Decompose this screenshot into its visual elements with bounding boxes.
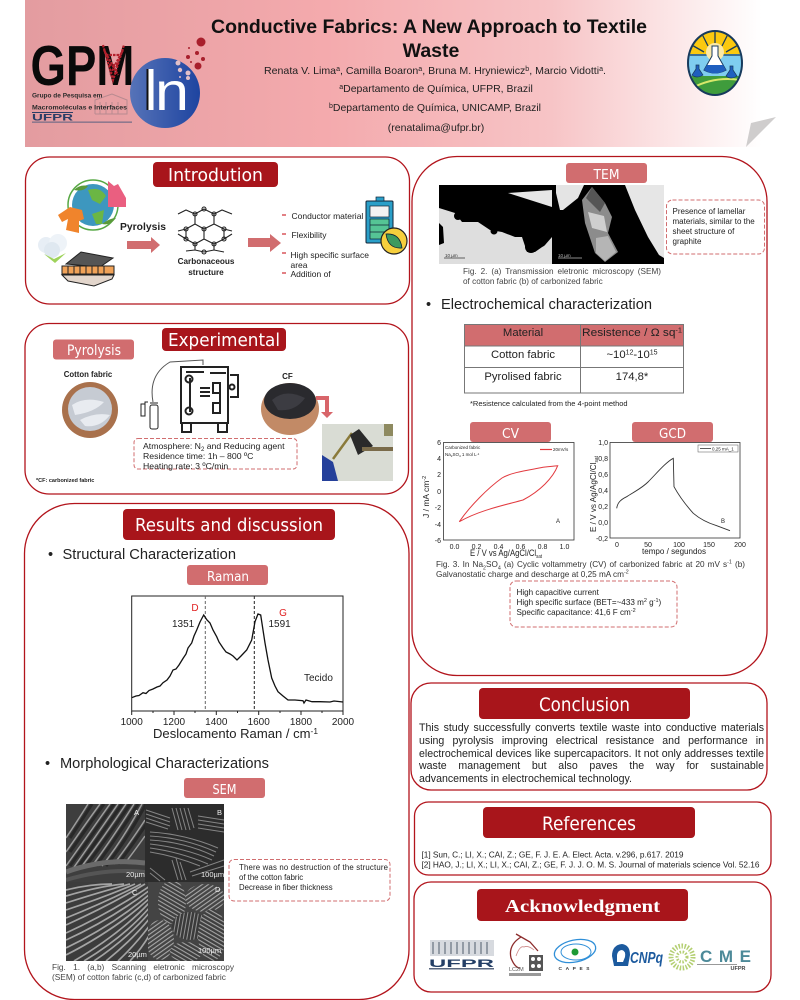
panel: acknowledgment (414, 882, 771, 992)
authors and affiliations: Departamento de Química, UNICAMP, Brazil (333, 102, 541, 114)
list: properties (282, 211, 369, 279)
title: Waste (403, 40, 460, 62)
caption: figure 2: of cotton fabric (b) of carbonized fabric (463, 277, 603, 286)
logo: LC2M: LC2M (509, 967, 524, 973)
chart: cyclic voltammetry: 20mV/s (553, 447, 569, 452)
heading: Introdution: Introdution (168, 165, 263, 186)
chart: Raman spectrum: 1800 (290, 717, 313, 728)
chart: cyclic voltammetry: 0.0 (450, 544, 459, 551)
image: SEM micrographs: D (215, 885, 221, 894)
subheading: Pyrolysis (53, 340, 134, 360)
icon: stacked fabric layers (62, 252, 114, 286)
list: properties: Flexibility (292, 230, 327, 240)
chart: galvanostatic charge-discharge: B (721, 519, 725, 525)
logo: GPM: GPM (30, 33, 134, 97)
title (211, 16, 647, 62)
logo: CAPES: CAPES (558, 966, 590, 972)
title: Conductive Fabrics: A New Approach to Textile (211, 16, 647, 38)
panel: TEM and electrochemical characterization (412, 156, 767, 676)
chart: cyclic voltammetry: 2 (437, 472, 441, 479)
callout: electrochemical findings: -1 (654, 598, 659, 604)
authors and affiliations: a (339, 84, 343, 91)
chart: galvanostatic charge-discharge: 0,4 (598, 488, 608, 495)
chart: Raman spectrum: D (191, 603, 199, 614)
conclusion text: electrochemical devices like supercapacitors. It not only addresses textile (419, 748, 764, 760)
authors and affiliations: b (329, 103, 333, 110)
callout: electrochemical findings: 2 (644, 598, 647, 604)
heading: Introdution (153, 162, 278, 187)
callout: lamellar materials: materials, similar to the (672, 217, 755, 226)
list: properties: High specific surface (290, 250, 369, 260)
image: SEM micrographs: A (134, 808, 139, 817)
logo: CNPq: CNPq (630, 950, 663, 967)
logo: GPM: Macromoléculas e Interfaces (32, 104, 127, 112)
reference list: [2] HAO, J.; LI, X.; LI, X.; CAI, Z.; GE, F. J. J. O. M. S. Journal of materials science Vol. 52.16 (422, 860, 760, 870)
callout: lamellar materials: sheet structure of (672, 227, 735, 236)
logo: In circle (130, 38, 206, 128)
logo: CME UFPR (671, 946, 751, 972)
chart: cyclic voltammetry: Na (445, 452, 451, 457)
chart: galvanostatic charge-discharge: -0,2 (596, 536, 608, 543)
label: Pyrolysis: Pyrolysis (120, 221, 166, 233)
conclusion text: This study successfully converts textile waste into conductive materials (419, 722, 764, 734)
chart: cyclic voltammetry: -1 (477, 452, 480, 456)
image: SEM micrographs: 20µm (126, 870, 145, 879)
image: cotton in bowl (62, 382, 118, 438)
chart: galvanostatic charge-discharge: 0,2 (598, 504, 608, 511)
heading: Acknowledgment (477, 889, 688, 921)
authors and affiliations: Departamento de Química, UFPR, Brazil (343, 83, 533, 95)
chart: Raman spectrum: Deslocamento Raman / cm (153, 727, 304, 741)
image: flexible carbonized sample photo (322, 424, 393, 481)
chart: galvanostatic charge-discharge: 1,0 (598, 440, 608, 447)
heading: Results and discussion: Results and discussion (135, 515, 323, 536)
image: TEM micrograph A (439, 185, 552, 264)
chart: cyclic voltammetry: -4 (435, 522, 441, 529)
chart: galvanostatic charge-discharge: 0,0 (598, 520, 608, 527)
subheading: Pyrolysis: Pyrolysis (67, 343, 121, 359)
panel: experimental (25, 324, 408, 494)
chart: cyclic voltammetry: Carbonized fabric (445, 445, 481, 450)
panel: conclusion (411, 683, 767, 790)
chart: cyclic voltammetry: 0 (437, 489, 441, 496)
chart: cyclic voltammetry: -2 (422, 476, 428, 481)
chart: Raman spectrum: 1600 (248, 717, 270, 728)
image: TEM micrograph A: 10 µm (445, 253, 458, 258)
chart: Raman spectrum: 1400 (205, 717, 228, 728)
subheading: CV (470, 422, 551, 442)
chart: cyclic voltammetry: E / V vs Ag/AgCl/Cl (470, 548, 545, 558)
arrow: pyrolysis (127, 237, 160, 253)
label: carbonaceous structure (178, 257, 235, 277)
callout: pyrolysis conditions: Heating rate: 3 ºC/min (143, 461, 228, 471)
arrow: to properties (248, 234, 281, 252)
conclusion text: waste management but also paves the way for sustainable (419, 760, 764, 772)
callout: SEM findings (229, 860, 390, 901)
image: TEM micrograph B: 10 µm (558, 253, 571, 258)
chart: cyclic voltammetry: 6 (437, 440, 441, 447)
logo: GPM: UFPR (32, 112, 73, 124)
table: resistance: Resistence / Ω sq (582, 327, 671, 339)
logo: CME UFPR: UFPR (731, 966, 746, 972)
caption: figure 3: Galvanostatic charge and descharge at 0,25 mA cm-2 (436, 569, 629, 579)
subsection: morphological characterizations: Morphological Characterizations (60, 756, 269, 772)
callout: pyrolysis conditions (134, 438, 297, 471)
callout: electrochemical findings: -2 (631, 608, 636, 614)
panel frame (414, 802, 771, 875)
section: electrochemical characterization: Electrochemical characterization (441, 297, 652, 313)
panel: introduction (26, 157, 410, 304)
authors and affiliations: Renata V. Lima (264, 65, 335, 77)
image: SEM micrographs: 100µm (201, 870, 224, 879)
subheading: GCD (632, 422, 713, 442)
authors and affiliations: , Marcio Vidotti (529, 65, 599, 77)
callout: electrochemical findings: High capacitive current (516, 588, 600, 597)
panel: results and discussion (24, 504, 409, 1000)
callout: pyrolysis conditions: Residence time: 1h – 800 ºC (143, 451, 253, 461)
callout: SEM findings: There was no destruction of the structure (239, 863, 388, 872)
chart: galvanostatic charge-discharge: sat (594, 455, 600, 463)
label: CF: CF (282, 372, 293, 381)
icon: gas cylinder with tube (141, 360, 203, 429)
subheading: Raman (187, 565, 268, 585)
chart: galvanostatic charge-discharge: 0,8 (598, 456, 608, 463)
callout: pyrolysis conditions: and Reducing agent (204, 441, 285, 451)
label: cotton fabric: Cotton fabric (64, 370, 113, 379)
label: carbonaceous structure: structure (188, 268, 224, 277)
authors and affiliations: , Bruna M. Hryniewicz (422, 65, 525, 77)
callout: electrochemical findings: ) (659, 598, 662, 607)
callout: electrochemical findings: High specific surface (BET=~433 m (516, 598, 644, 607)
arrow: to flexible sample (316, 396, 333, 418)
chart: cyclic voltammetry: 0.2 (472, 544, 481, 551)
chart: cyclic voltammetry: -2 (435, 505, 441, 512)
table: resistance: 174,8* (616, 371, 649, 383)
list: properties: Conductor material (292, 211, 363, 221)
chart: Raman spectrum: -1 (311, 727, 319, 736)
panel frame (411, 683, 767, 790)
chart: cyclic voltammetry (421, 440, 574, 560)
logo: CME UFPR: CME (700, 947, 751, 966)
chart: cyclic voltammetry: J / mA cm (421, 481, 431, 518)
panel: references (414, 802, 771, 875)
callout: lamellar materials (666, 200, 764, 254)
authors and affiliations: . (603, 65, 606, 77)
header banner (25, 0, 777, 147)
callout: SEM findings: of the cotton fabric (239, 873, 303, 882)
image: SEM micrographs (66, 804, 226, 962)
subheading: SEM (184, 778, 265, 798)
heading: References: References (542, 813, 636, 835)
logo: CNPq (612, 944, 663, 967)
heading: References (483, 807, 695, 838)
image: SEM micrographs: B (217, 808, 222, 817)
caption: figure 2 (463, 267, 661, 286)
chart: cyclic voltammetry: -6 (435, 538, 441, 545)
panel frame (24, 504, 409, 1000)
conclusion text: advancements in electrochemical technology. (419, 773, 632, 785)
subheading: TEM (566, 163, 647, 183)
panel frame (414, 882, 771, 992)
image: TEM micrograph B (552, 185, 664, 264)
caption: figure 1: Fig. 1. (a,b) Scanning eletronic microscopy (52, 962, 234, 972)
heading: Acknowledgment: Acknowledgment (505, 896, 660, 916)
table: resistance: Cotton fabric (491, 349, 555, 361)
table: resistance: Pyrolised fabric (484, 371, 562, 383)
label: carbonaceous structure: Carbonaceous (178, 257, 235, 266)
chart: Raman spectrum: 1200 (163, 717, 186, 728)
subheading: CV: CV (502, 426, 520, 442)
table: resistance: -10 (633, 349, 650, 361)
chart: cyclic voltammetry: 0.4 (494, 544, 503, 551)
callout: electrochemical findings: g (647, 598, 654, 607)
logo: CAPES (552, 936, 598, 972)
chart: galvanostatic charge-discharge: 100 (673, 542, 685, 549)
caption: figure 3 (436, 559, 745, 579)
authors and affiliations: b (525, 66, 529, 73)
logo: UFPR (429, 940, 494, 970)
chart: Raman spectrum: G (279, 608, 287, 619)
image: SEM micrographs: 100µm (198, 946, 221, 955)
chart: galvanostatic charge-discharge (588, 440, 746, 556)
conclusion text: using pyrolysis improving electrical resistance and performance in (419, 735, 764, 747)
chart: Raman spectrum (121, 596, 355, 741)
table: resistance: Material (503, 327, 543, 339)
logo: UFPR: UFPR (429, 958, 494, 970)
chart: galvanostatic charge-discharge: 150 (703, 542, 715, 549)
chart: Raman spectrum: 2000 (332, 717, 355, 728)
section: electrochemical characterization: • (426, 297, 431, 313)
caption: figure 1: (SEM) of cotton fabric (c,d) of carbonized fabric (52, 972, 226, 982)
chart: galvanostatic charge-discharge: tempo / segundos (642, 546, 706, 556)
panel frame (412, 156, 767, 676)
authors and affiliations: (renatalima@ufpr.br) (388, 122, 484, 134)
subheading: TEM: TEM (593, 167, 620, 183)
chart: cyclic voltammetry: 1 mol L (461, 452, 477, 457)
page curl (746, 117, 776, 147)
callout: lamellar materials: graphite (672, 237, 702, 246)
chart: galvanostatic charge-discharge: 0,25 mA_1 (712, 446, 734, 452)
reference list (422, 850, 760, 870)
heading: Conclusion: Conclusion (539, 694, 630, 716)
icon: green battery (366, 197, 407, 254)
icon: furnace (181, 367, 238, 432)
footnote: resistance method: *Resistence calculated from the 4-point method (470, 399, 628, 408)
panel frame (26, 157, 410, 304)
subheading: SEM: SEM (212, 782, 236, 798)
image: SEM micrographs: 20µm (128, 950, 147, 959)
list: properties: area (290, 260, 308, 270)
table: resistance: -1 (675, 328, 682, 334)
callout: electrochemical findings (510, 581, 677, 627)
icon: carbon hexagon structure (178, 207, 232, 254)
chart: cyclic voltammetry: 4 (437, 456, 441, 463)
callout: pyrolysis conditions: 2 (201, 447, 205, 453)
callout: electrochemical findings: Specific capacitance: 41,6 F cm (516, 608, 631, 617)
logo: flask emblem (685, 30, 745, 96)
logo: LC2M (509, 934, 543, 976)
chart: cyclic voltammetry: SO (452, 452, 459, 457)
authors and affiliations: a (418, 66, 422, 73)
chart: galvanostatic charge-discharge: 200 (734, 542, 746, 549)
caption: figure 1 (52, 962, 234, 982)
heading: Results and discussion (123, 509, 335, 540)
subheading: GCD: GCD (659, 426, 686, 442)
heading: Conclusion (479, 688, 690, 719)
chart: cyclic voltammetry: sat (536, 554, 543, 560)
chart: cyclic voltammetry: 2 (451, 454, 453, 458)
panel frame (25, 324, 408, 494)
icon: globe with textile waste (58, 180, 126, 233)
table: resistance: ~10 (606, 349, 626, 361)
chart: cyclic voltammetry: 0.6 (516, 544, 525, 551)
chart: Raman spectrum: 1591 (268, 619, 291, 630)
authors and affiliations: , Camilla Boaron (340, 65, 418, 77)
authors and affiliations: a (336, 66, 340, 73)
callout: lamellar materials: Presence of lamellar (672, 207, 746, 216)
subsection: structural characterization: • (48, 547, 53, 563)
reference list: [1] Sun, C.; LI, X.; CAI, Z.; GE, F. J. E. A. Elect. Acta. v.296, p.617. 2019 (422, 850, 684, 860)
conclusion text (419, 722, 764, 785)
subsection: structural characterization: Structural Characterization (62, 547, 236, 563)
chart: galvanostatic charge-discharge: 0 (615, 542, 619, 549)
chart: Raman spectrum: 1000 (121, 717, 143, 728)
chart: cyclic voltammetry: 1.0 (560, 544, 569, 551)
logo: GPM: Grupo de Pesquisa em (32, 92, 103, 100)
callout: pyrolysis conditions: Atmosphere: N (143, 441, 201, 451)
chart: galvanostatic charge-discharge: 0,6 (598, 472, 608, 479)
subsection: morphological characterizations: • (45, 756, 50, 772)
authors and affiliations: a (599, 66, 603, 73)
callout: SEM findings: Decrease in fiber thickness (239, 883, 333, 892)
table: resistance: 15 (650, 350, 658, 356)
icon: cotton boll (38, 234, 67, 263)
image: carbonized fabric in bowl (261, 383, 319, 435)
chart: cyclic voltammetry: 0.8 (538, 544, 547, 551)
logo: In circle: n (155, 62, 189, 122)
list: properties: Addition of (290, 269, 331, 279)
caption: figure 2: Fig. 2. (a) Transmission eletronic microscopy (SEM) (463, 267, 661, 276)
chart: Raman spectrum: Tecido (304, 673, 333, 684)
authors and affiliations (264, 65, 606, 134)
table: resistance: 12 (626, 350, 634, 356)
banner background (25, 0, 777, 147)
chart: Raman spectrum: 1351 (172, 619, 195, 630)
heading: Experimental: Experimental (168, 330, 280, 351)
chart: cyclic voltammetry: A (556, 519, 560, 525)
image: SEM micrographs: C (132, 888, 138, 897)
table: resistance (464, 324, 684, 393)
chart: galvanostatic charge-discharge: 50 (644, 542, 652, 549)
caption: figure 3: Fig. 3. In Na2SO4 (a) Cyclic voltammetry (CV) of carbonized fabric at 20 mV s-1 (b) (436, 559, 745, 572)
chart: galvanostatic charge-discharge: E / V vs Ag/AgCl/Cl (588, 461, 598, 532)
subheading: Raman: Raman (207, 569, 249, 585)
footnote: CF: *CF: carbonized fabric (36, 478, 94, 484)
chart: cyclic voltammetry: 4 (459, 454, 461, 458)
